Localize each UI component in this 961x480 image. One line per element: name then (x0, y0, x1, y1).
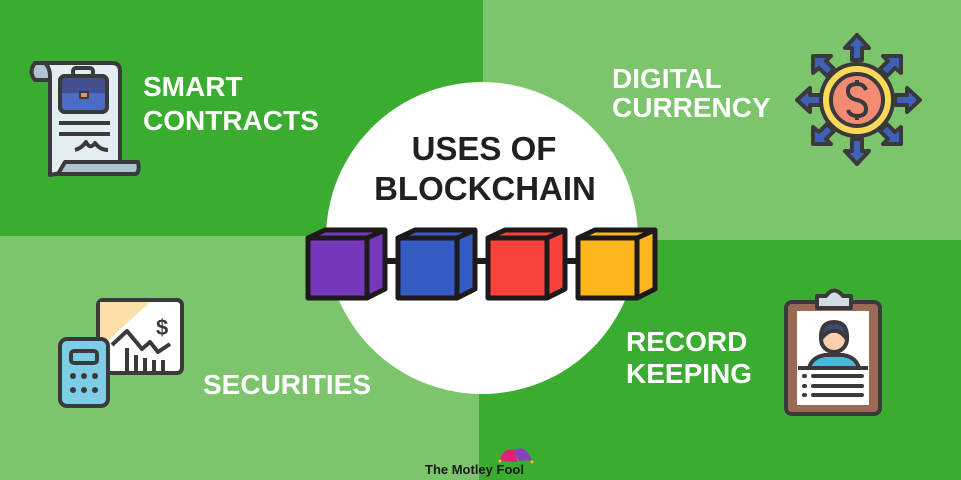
heading: digital currency (612, 63, 771, 123)
heading: record keeping: KEEPING (626, 358, 752, 389)
title: USES OF (412, 130, 556, 167)
icon: digital currency (797, 35, 920, 164)
icon: record keeping clipboard (786, 290, 880, 414)
icon: securities: $ (156, 315, 168, 340)
heading: smart contracts: SMART (143, 71, 243, 102)
logo: The Motley Fool: The Motley Fool (425, 462, 524, 477)
icon: securities (60, 300, 182, 406)
logo: The Motley Fool (425, 448, 534, 477)
title (374, 130, 596, 207)
heading: record keeping: RECORD (626, 326, 747, 357)
cube red (488, 230, 565, 298)
heading: record keeping (626, 326, 752, 389)
icon: smart contract scroll (32, 63, 139, 175)
heading: digital currency: DIGITAL (612, 63, 722, 94)
heading: smart contracts: CONTRACTS (143, 105, 319, 136)
cube blue (398, 230, 475, 298)
heading: securities: SECURITIES (203, 369, 371, 400)
heading: digital currency: CURRENCY (612, 92, 771, 123)
center circle (326, 82, 638, 394)
cube purple (308, 230, 385, 298)
cube yellow (578, 230, 655, 298)
title: BLOCKCHAIN (374, 170, 596, 207)
blockchain cubes (308, 230, 655, 298)
heading: smart contracts (143, 71, 319, 136)
